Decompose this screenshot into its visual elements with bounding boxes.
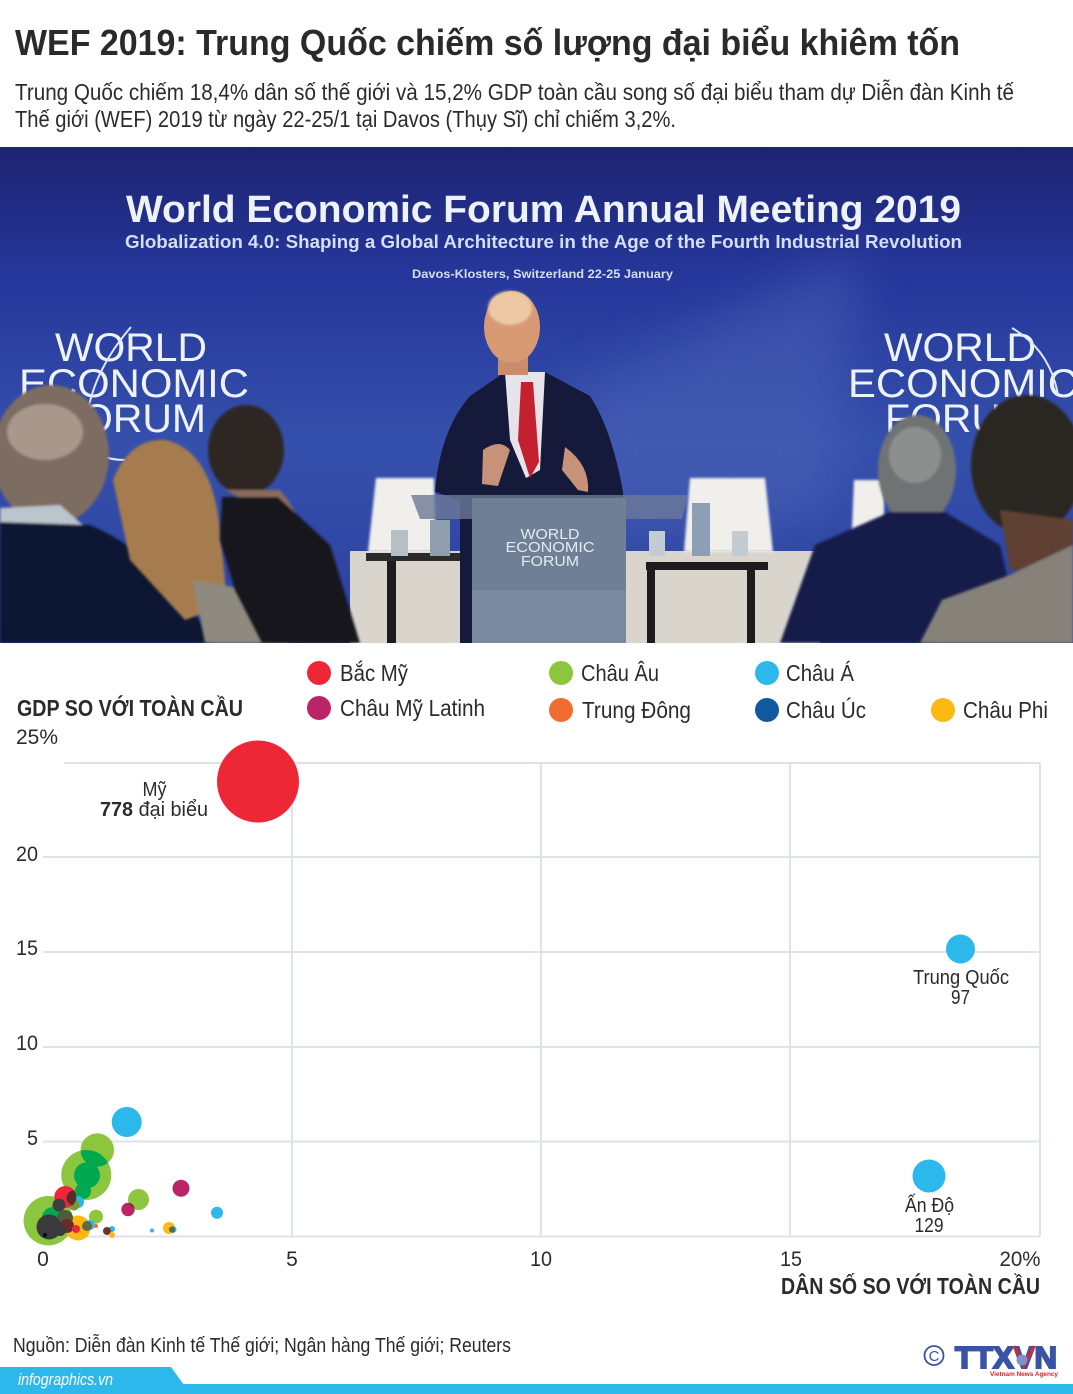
audience member: grey-haired man right (780, 415, 1008, 643)
legend item: Châu Á (755, 660, 855, 686)
intro text (15, 79, 1014, 132)
cluster of small country bubbles (24, 1107, 223, 1245)
bubble: China: 97 (951, 987, 970, 1009)
legend item: Châu Âu: Châu Âu (581, 660, 659, 686)
bubble: India (905, 1160, 954, 1237)
lectern (411, 495, 688, 643)
right WEF logo: WORLD (884, 326, 1036, 370)
y-axis title: GDP SO VỚI TOÀN CẦU (17, 694, 243, 721)
legend item: Bắc Mỹ (307, 660, 408, 686)
x-axis labels: 5 (286, 1248, 298, 1271)
y-axis labels: 15 (16, 937, 38, 960)
lectern: WORLD (520, 526, 580, 543)
bubble: China (913, 934, 1009, 1009)
audience member: bald man left (0, 385, 212, 643)
y-axis labels (16, 726, 58, 1150)
right WEF logo: FORUM (885, 397, 1035, 441)
source: Nguồn: Diễn đàn Kinh tế Thế giới; Ngân hàng Thế giới; Reuters (13, 1334, 511, 1357)
legend item: Châu Âu (549, 660, 659, 686)
x-axis labels: 15 (780, 1248, 802, 1271)
bubble: United States: 778 đại biểu (100, 799, 208, 821)
left WEF logo: FORUM (56, 397, 206, 441)
audience member: dark-haired man far right (920, 395, 1073, 643)
left WEF logo (19, 326, 249, 460)
bubble: India: 129 (914, 1215, 944, 1237)
y-axis labels: 25% (16, 726, 58, 749)
banner heading: World Economic Forum Annual Meeting 2019 (126, 189, 961, 231)
logo: TTXVN: Vietnam News Agency (990, 1371, 1058, 1378)
left WEF logo: WORLD (55, 326, 207, 370)
legend item: Châu Phi (931, 697, 1048, 723)
footer site name: infographics.vn (18, 1370, 113, 1389)
legend item: Châu Á: Châu Á (786, 660, 855, 686)
legend item: Châu Mỹ Latinh: Châu Mỹ Latinh (340, 695, 485, 721)
legend item: Châu Phi: Châu Phi (963, 697, 1048, 723)
x-axis labels: 0 (37, 1248, 49, 1271)
legend item: Trung Đông: Trung Đông (582, 697, 691, 723)
bubble: United States (100, 740, 299, 822)
bubble: China: Trung Quốc (913, 967, 1009, 989)
footer bar (0, 1367, 1073, 1394)
bubble: India: Ấn Độ (905, 1194, 954, 1217)
right WEF logo: ECONOMIC (848, 362, 1073, 406)
legend (307, 660, 1048, 723)
x-axis labels (37, 1248, 1040, 1271)
white chairs (368, 478, 884, 552)
y-axis labels: 20 (16, 843, 38, 866)
logo: TTXVN: C (929, 1348, 940, 1365)
x-axis labels: 10 (530, 1248, 552, 1271)
right WEF logo (848, 326, 1073, 441)
floor and back wall (350, 551, 820, 643)
y-axis labels: 10 (16, 1032, 38, 1055)
legend item: Châu Úc (755, 697, 866, 723)
intro text: Thế giới (WEF) 2019 từ ngày 22-25/1 tại Davos (Thụy Sĩ) chỉ chiếm 3,2%. (15, 106, 676, 132)
banner heading (125, 189, 962, 281)
speaker (435, 291, 623, 643)
legend item: Bắc Mỹ: Bắc Mỹ (340, 660, 408, 686)
audience member: woman with blonde hair (113, 440, 290, 643)
y-axis labels: 5 (27, 1127, 38, 1150)
logo: TTXVN: TTXVN (955, 1340, 1057, 1375)
bubble: United States: Mỹ (142, 779, 166, 801)
logo: TTXVN (924, 1340, 1058, 1378)
lectern: ECONOMIC (506, 539, 595, 556)
photo: WEF annual meeting stage (0, 147, 1073, 643)
left WEF logo: ECONOMIC (19, 362, 249, 406)
x-axis labels: 20% (1000, 1248, 1040, 1271)
lectern: FORUM (521, 553, 579, 570)
legend item: Châu Úc: Châu Úc (786, 697, 866, 723)
banner heading: Davos-Klosters, Switzerland 22-25 January (412, 267, 673, 281)
side tables with glasses (366, 503, 768, 643)
audience member: dark-haired man (208, 405, 360, 643)
title: WEF 2019: Trung Quốc chiếm số lượng đại biểu khiêm tốn (15, 22, 960, 63)
banner heading: Globalization 4.0: Shaping a Global Architecture in the Age of the Fourth Industrial Revolution (125, 232, 962, 252)
bubble chart (16, 726, 1040, 1299)
